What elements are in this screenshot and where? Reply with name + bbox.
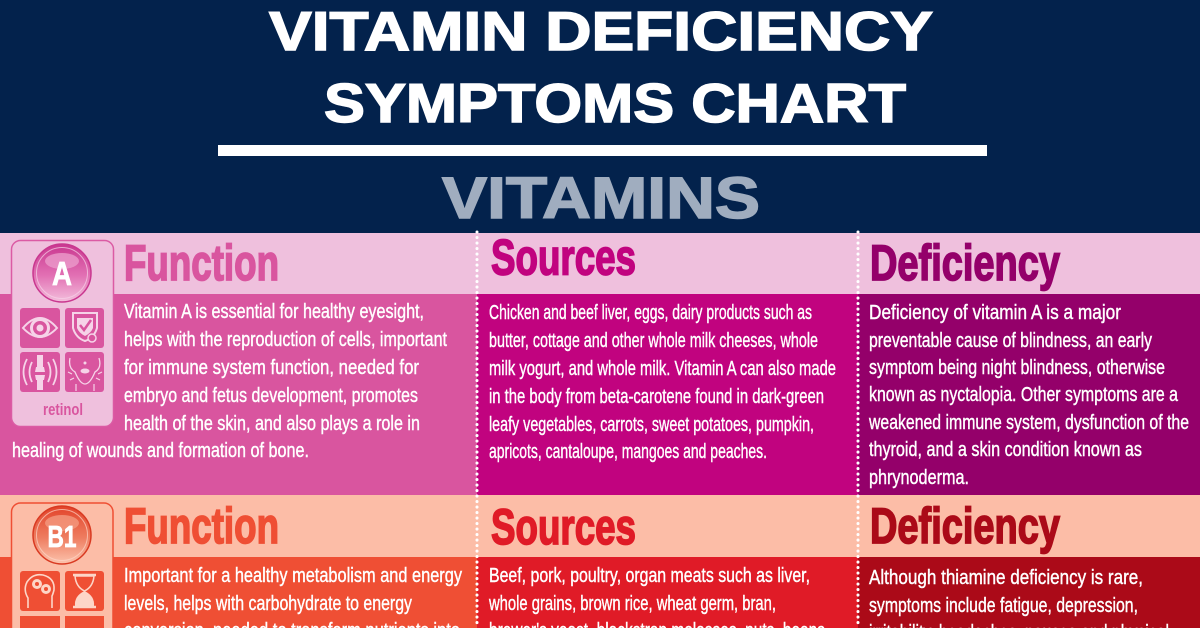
icon: eye — [20, 308, 60, 348]
icon: A badge: A — [52, 255, 72, 292]
vitamin B1 badge card — [12, 503, 113, 628]
sources column — [489, 230, 836, 463]
section heading: vitamins: VITAMINS — [442, 166, 760, 231]
deficiency column: Deficiency — [870, 235, 1060, 291]
panel: vitamin B1 — [0, 495, 1200, 628]
function column: Important for a healthy metabolism and energy — [124, 565, 462, 587]
function column: for immune system function, needed for — [124, 357, 419, 379]
deficiency column: thyroid, and a skin condition known as — [869, 439, 1142, 461]
deficiency column: phrynoderma. — [869, 467, 969, 489]
deficiency column: Deficiency of vitamin A is a major — [869, 302, 1121, 324]
icon: brain in head — [20, 571, 60, 611]
header banner — [0, 0, 1200, 233]
function column: health of the skin, and also plays a role in — [124, 413, 420, 435]
title: VITAMIN DEFICIENCY — [269, 0, 933, 62]
function column: embryo and fetus development, promotes — [124, 385, 418, 407]
icon: B1 badge: B1 — [48, 519, 76, 554]
function column: levels, helps with carbohydrate to energy — [124, 593, 412, 615]
sources column: Sources — [491, 230, 636, 286]
vitamin A badge card — [12, 240, 114, 426]
function column: helps with the reproduction of cells, important — [124, 329, 447, 351]
label: retinol: retinol — [43, 400, 83, 419]
icon: joint — [20, 352, 60, 392]
deficiency column — [869, 498, 1169, 628]
sources column: Beef, pork, poultry, organ meats such as liver, — [489, 565, 810, 587]
sources column — [488, 499, 825, 628]
title rule — [218, 145, 987, 156]
icon: face and neck — [65, 352, 104, 392]
sources column: milk yogurt, and whole milk. Vitamin A can also made — [489, 358, 836, 380]
function column — [124, 498, 462, 628]
function column: Vitamin A is essential for healthy eyesight, — [124, 301, 424, 323]
icon: shield — [65, 308, 104, 348]
sources column: in the body from beta-carotene found in dark-green — [489, 386, 824, 408]
deficiency column — [868, 235, 1189, 489]
sources column: Sources — [491, 499, 636, 555]
function column — [12, 235, 447, 462]
function column: Function — [124, 235, 279, 291]
icon: partial lower right — [65, 616, 104, 628]
title — [269, 0, 933, 134]
function column: Function — [124, 498, 279, 554]
function column: healing of wounds and formation of bone. — [12, 440, 309, 462]
sources column: butter, cottage and other whole milk cheeses, whole — [489, 330, 818, 352]
sources column: leafy vegetables, carrots, sweet potatoes, pumpkin, — [489, 414, 814, 436]
title: SYMPTOMS CHART — [324, 72, 906, 134]
deficiency column: symptoms include fatigue, depression, — [869, 595, 1138, 617]
icon: hourglass — [65, 571, 104, 611]
deficiency column: Although thiamine deficiency is rare, — [869, 567, 1143, 589]
deficiency column: Deficiency — [870, 498, 1060, 554]
icon: A badge — [33, 244, 91, 302]
icon: partial lower left — [20, 616, 60, 628]
panel: vitamin A — [0, 230, 1200, 495]
sources column: apricots, cantaloupe, mangoes and peaches. — [489, 441, 767, 463]
sources column: whole grains, brown rice, wheat germ, bran, — [488, 593, 776, 615]
sources column: Chicken and beef liver, eggs, dairy products such as — [489, 302, 812, 324]
